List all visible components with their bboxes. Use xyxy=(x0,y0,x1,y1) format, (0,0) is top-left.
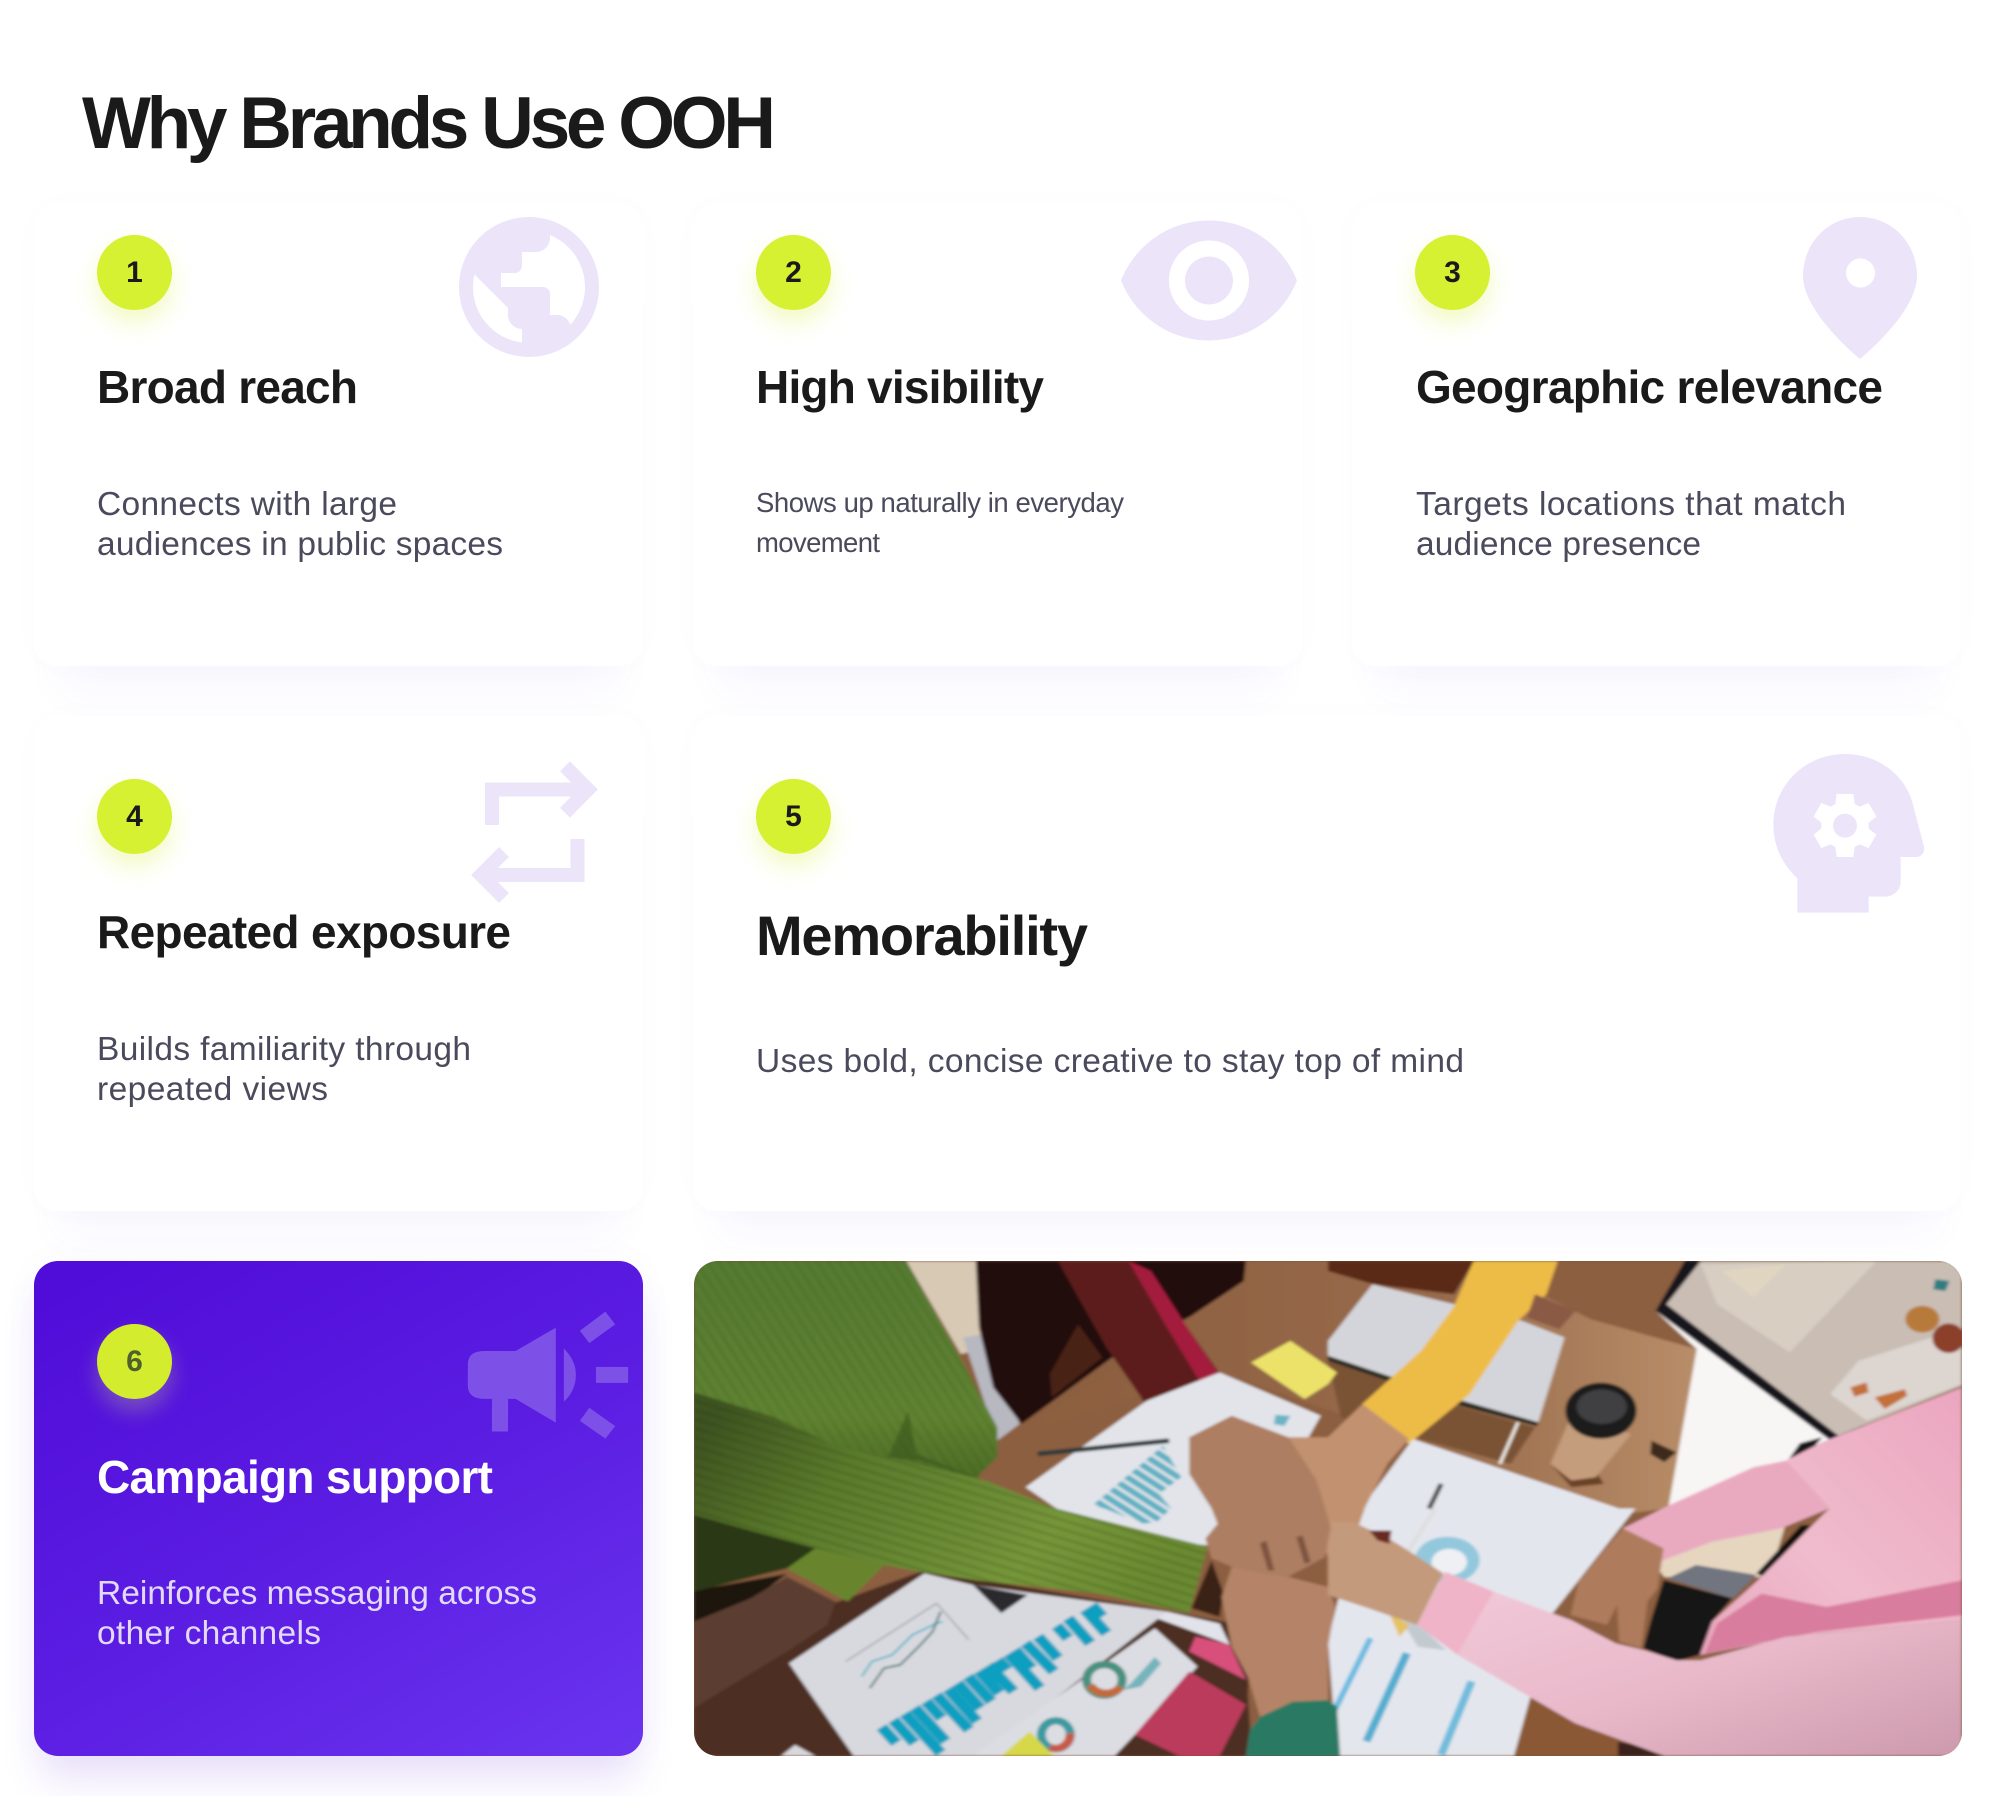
pink torso xyxy=(1699,1387,1962,1655)
description xyxy=(97,486,503,563)
description xyxy=(97,1575,537,1652)
table base xyxy=(694,1261,1962,1756)
wrist shadow xyxy=(1191,1560,1223,1617)
badge 4: 4 xyxy=(126,800,143,833)
fingers by laptop xyxy=(1526,1294,1575,1329)
pink lower sleeve xyxy=(1457,1592,1962,1756)
icon: repeat arrows xyxy=(481,766,588,898)
heading: Repeated exposure xyxy=(97,906,511,958)
icon: megaphone xyxy=(468,1312,628,1438)
badge 5 xyxy=(756,779,831,854)
panel: high visibility xyxy=(693,204,1302,666)
description: Targets locations that match xyxy=(1416,486,1846,523)
icon: globe xyxy=(459,217,599,357)
title: Why Brands Use OOH xyxy=(82,83,776,164)
upper-left paper xyxy=(1025,1372,1328,1547)
badge 1 xyxy=(97,235,172,310)
description: repeated views xyxy=(97,1071,328,1108)
heading: Campaign support xyxy=(97,1451,493,1503)
badge 6: 6 xyxy=(126,1345,143,1378)
badge 6 xyxy=(97,1324,172,1399)
dark person xyxy=(975,1261,1245,1424)
description: Builds familiarity through xyxy=(97,1031,471,1068)
heading: Memorability xyxy=(756,904,1088,967)
panel: campaign support xyxy=(34,1261,643,1756)
heading: Geographic relevance xyxy=(1416,361,1883,413)
badge 3: 3 xyxy=(1444,256,1461,289)
panel: repeated exposure xyxy=(34,716,643,1211)
description: other channels xyxy=(97,1615,321,1652)
floor left xyxy=(906,1261,985,1354)
description: movement xyxy=(756,527,880,558)
floor leg and chair xyxy=(1667,1565,1756,1598)
description: audience presence xyxy=(1416,526,1701,563)
description: Uses bold, concise creative to stay top of mind xyxy=(756,1043,1464,1080)
description: Connects with large xyxy=(97,486,397,523)
second hand xyxy=(1288,1404,1408,1560)
presentation board xyxy=(1655,1261,1962,1443)
top hand xyxy=(1189,1416,1330,1577)
right wrist xyxy=(1328,1522,1443,1625)
bright wall xyxy=(1555,1261,1907,1507)
badge 5: 5 xyxy=(785,800,802,833)
sticky note xyxy=(1251,1341,1336,1399)
description: Shows up naturally in everyday xyxy=(756,487,1124,518)
laptop xyxy=(1328,1284,1564,1422)
badge 2 xyxy=(756,235,831,310)
badge 4 xyxy=(97,779,172,854)
badge 2: 2 xyxy=(785,256,802,289)
panel: geographic relevance xyxy=(1352,204,1961,666)
description xyxy=(1416,486,1846,563)
photo: team stacking hands over a table of charts xyxy=(694,1261,1962,1756)
pink upper sleeve xyxy=(1623,1461,1829,1562)
line chart xyxy=(845,1603,968,1688)
blue bar chart xyxy=(881,1605,1106,1753)
description: audiences in public spaces xyxy=(97,526,503,563)
bottom papers xyxy=(789,1573,1167,1756)
description xyxy=(756,487,1124,558)
description: Reinforces messaging across xyxy=(97,1575,537,1612)
bottom wood and left hand xyxy=(694,1570,1251,1756)
panel: broad reach xyxy=(34,204,643,666)
icon: eye xyxy=(1121,220,1297,340)
donuts on paper xyxy=(1086,1665,1122,1695)
icon: map pin xyxy=(1803,217,1917,359)
coffee cup xyxy=(1550,1464,1603,1487)
green sweater xyxy=(694,1261,997,1487)
yellow sleeve xyxy=(1362,1261,1557,1444)
icon: head with gear xyxy=(1773,754,1924,912)
panel: memorability xyxy=(693,716,1961,1211)
badge 1: 1 xyxy=(126,256,143,289)
heading: Broad reach xyxy=(97,361,358,413)
badge 3 xyxy=(1415,235,1490,310)
heading: High visibility xyxy=(756,361,1044,413)
lower hand xyxy=(1221,1567,1334,1717)
centre document xyxy=(1328,1439,1635,1756)
cable xyxy=(1499,1422,1518,1464)
red notes xyxy=(1134,1672,1245,1756)
description xyxy=(97,1031,471,1108)
left hand xyxy=(1570,1528,1663,1648)
teal sleeve xyxy=(1245,1700,1340,1756)
